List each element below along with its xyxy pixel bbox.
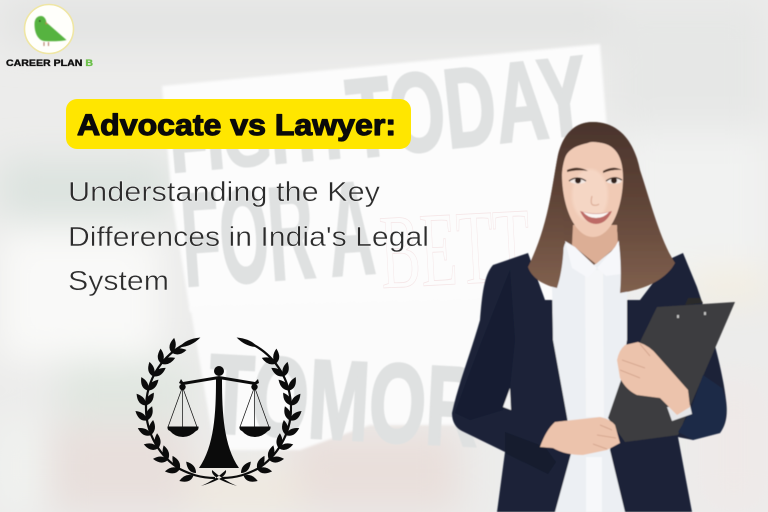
subtitle text block [68,176,429,296]
front hair left lock [528,122,593,288]
face highlight [572,169,608,221]
subtitle text block: System [68,265,169,296]
right arm sleeve over clipboard edge [678,375,726,440]
left sleeve cuff [505,432,556,474]
sign lettering: fight today [166,32,593,470]
shirt collar [565,240,621,278]
woman in navy blazer holding clipboard [452,122,735,512]
title text: Advocate vs Lawyer: [77,109,396,142]
eyes [570,178,586,184]
yellow highlight [66,99,411,149]
scale column and base [199,377,239,468]
sign lettering: fight today: TOMOR [206,331,482,470]
eyebrows [567,168,622,173]
laurel: right branch [222,336,303,483]
shirt placket [585,270,604,417]
blazer left arm shadow [455,270,515,420]
left hand finger lines [593,425,616,449]
clipboard rivets [677,312,706,318]
icon: scales of justice in laurel wreath [134,336,303,486]
title pill: advocate vs lawyer [66,99,411,149]
scale beam [179,376,259,385]
gap between arm and torso [503,388,511,410]
subtitle text block: Differences in India's Legal [68,221,429,252]
sign lettering: better outline: BETT [377,186,533,311]
laurel: left branch [134,336,215,483]
icon: green bird [34,16,66,46]
protest sign: top board [162,44,625,312]
crossed stems at base [201,470,237,486]
clipboard [608,302,735,442]
logo wordmark: CAREER PLAN B [6,58,93,69]
clipboard clip [685,298,703,305]
neck [572,225,618,264]
back hair [528,122,675,293]
sign lettering: fight today: FIGHT [166,85,355,189]
face [562,142,623,237]
right hand [617,342,690,415]
logo: career plan b [6,4,93,69]
sign lettering: fight today: FOR A [177,154,378,314]
sign lettering: fight today: TODAY [341,32,593,182]
subtitle text block: Understanding the Key [68,176,380,207]
left pan [167,384,199,437]
protest sign: lower board [190,298,540,450]
front hair right lock [591,122,675,293]
white shirt [552,243,627,512]
smile [580,211,612,224]
shirt cuff [667,405,692,421]
scale top ball [214,366,224,376]
left hand [540,417,620,455]
nose [591,196,599,205]
right pan [239,384,271,437]
blazer body [452,253,727,512]
right hand finger lines [620,344,650,378]
logo circle [24,4,74,54]
